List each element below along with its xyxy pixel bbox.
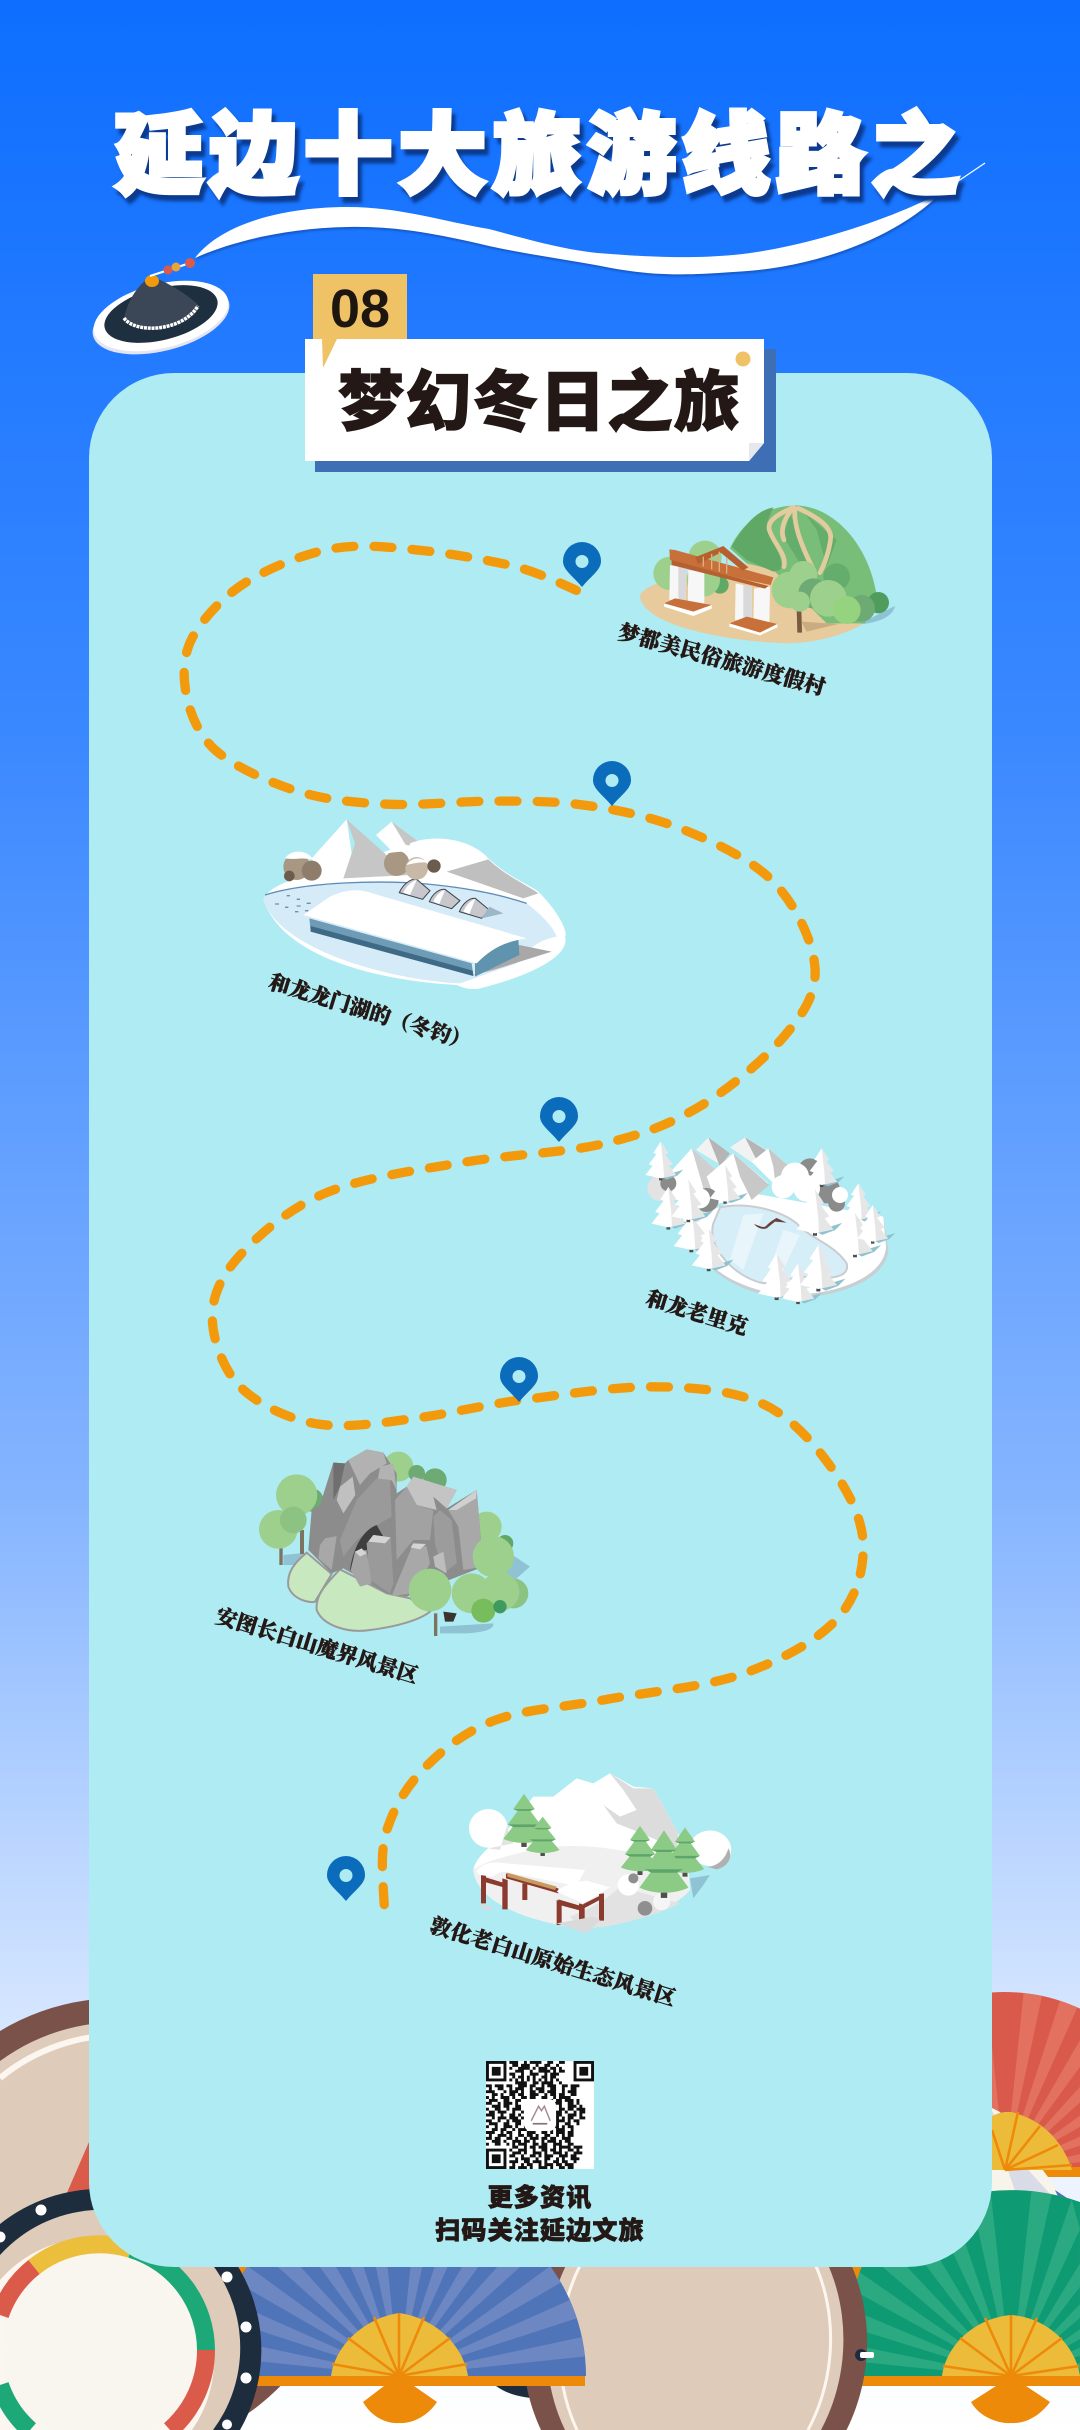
blue fan: [212, 2189, 586, 2423]
panel: light blue card: [89, 373, 992, 2267]
footer text: 更多资讯: [488, 2184, 592, 2212]
scene 4: rock formation and trees: [259, 1449, 530, 1636]
decoration: bottom fans and drums: [0, 1992, 1080, 2430]
QR code: [486, 2061, 594, 2169]
label 3: 和龙老里克: [643, 1286, 751, 1340]
number tab 08: 08: [330, 279, 390, 339]
right brown drum: [523, 2160, 874, 2430]
label 4: 安图长白山魔界风景区: [213, 1604, 421, 1688]
left brown drum: [0, 1998, 346, 2430]
footer text: [435, 2184, 645, 2245]
green fan: [815, 2190, 1080, 2423]
footer text: 扫码关注延边文旅: [435, 2216, 645, 2245]
scene 5: snow mountain, trees and pavilion: [469, 1773, 731, 1933]
number tab 08: [313, 274, 407, 340]
icon: hat: [85, 258, 237, 367]
orange slivers: [238, 2266, 862, 2292]
subtitle card: [305, 339, 776, 472]
title: 延边十大旅游线路之: [115, 106, 966, 205]
pin 2: [593, 761, 631, 806]
dark drum with colored ring: [0, 2189, 261, 2430]
scene 1: resort gate and green hill: [640, 505, 895, 643]
pin 3: [540, 1097, 578, 1142]
yellow fan head on red fan: [992, 2112, 1072, 2170]
red wedge: [66, 2135, 92, 2195]
label 2: 和龙龙门湖的（冬钓）: [266, 970, 474, 1054]
dashed route: [184, 546, 863, 1906]
label 1: 梦都美民俗旅游度假村: [616, 620, 828, 700]
pin 1: [563, 542, 601, 587]
red fan: [827, 1992, 1080, 2177]
pin 4: [500, 1357, 538, 1402]
subtitle text: 梦幻冬日之旅: [338, 365, 741, 439]
title swoosh ribbon: [195, 163, 985, 274]
label 5: 敦化老白山原始生态风景区: [427, 1913, 679, 2011]
dark drum back: [496, 2386, 546, 2399]
scene 3: snowy forest and lake: [645, 1137, 895, 1304]
white striped fan: [992, 2108, 1070, 2205]
scene 2: frozen lake and ice-fishing hall: [263, 819, 566, 989]
pin 5: [327, 1856, 365, 1901]
